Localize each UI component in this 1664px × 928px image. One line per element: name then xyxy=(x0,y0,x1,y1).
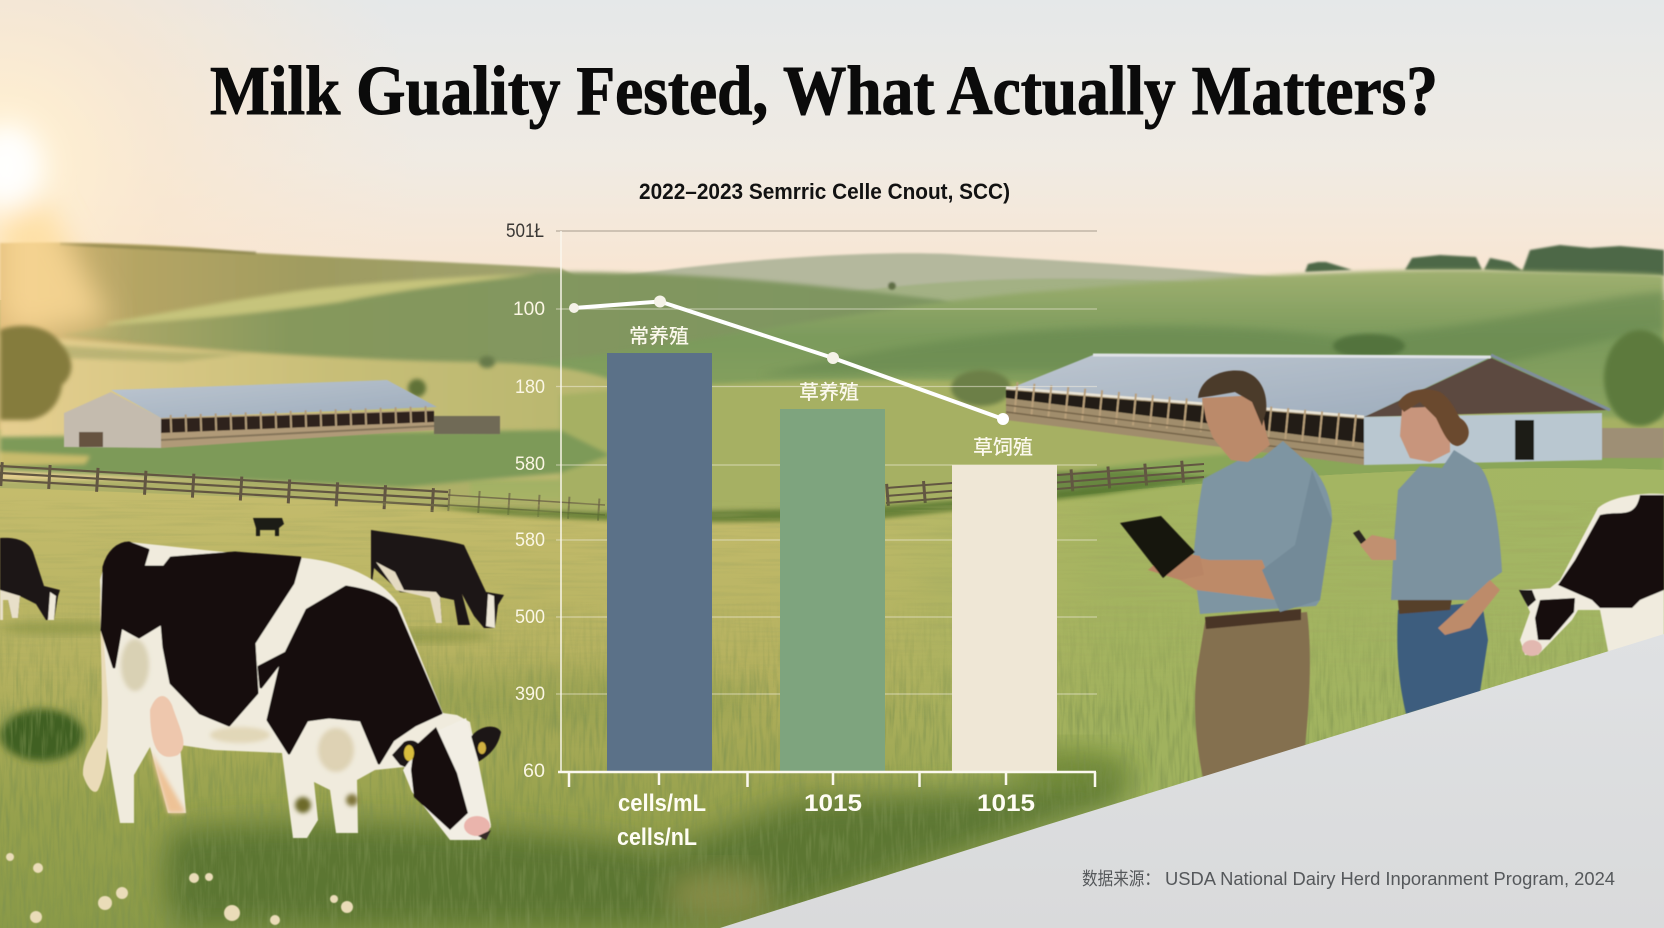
foreground pasture xyxy=(0,468,1664,928)
woman forearm and hand xyxy=(1353,530,1500,635)
barn left xyxy=(64,380,500,448)
cow: right xyxy=(1519,494,1664,680)
right cow muzzle xyxy=(1522,640,1542,656)
source note: 数据来源： xyxy=(1082,869,1160,889)
bar: 常养殖 xyxy=(607,353,712,771)
y axis labels: 500 xyxy=(515,607,545,628)
right cow body xyxy=(1520,494,1664,680)
bar labels: 草饲殖 xyxy=(973,436,1033,459)
woman hair xyxy=(1398,389,1469,446)
distant hills xyxy=(560,253,1320,340)
man neck and face xyxy=(1202,395,1270,462)
flowers xyxy=(6,853,353,925)
man belt xyxy=(1205,609,1301,629)
cow: left edge xyxy=(0,538,60,620)
cow: mid xyxy=(371,530,504,628)
treeline right xyxy=(1305,245,1664,276)
tablet xyxy=(1120,516,1195,578)
title: Milk Guality Fested, What Actually Matters? xyxy=(210,53,1438,130)
y axis labels xyxy=(506,221,545,782)
y axis labels: 60 xyxy=(523,761,545,782)
man hair xyxy=(1198,370,1266,426)
bar labels: 常养殖 xyxy=(629,325,689,348)
woman face xyxy=(1400,406,1450,462)
x axis labels xyxy=(617,790,1035,851)
right hill xyxy=(470,270,1664,500)
x axis labels: 1015 xyxy=(804,790,862,817)
cow head xyxy=(392,718,501,840)
cow: far xyxy=(253,518,284,536)
x axis labels: cells/nL xyxy=(617,824,697,851)
y axis labels: 501Ł xyxy=(506,221,544,242)
main cow xyxy=(83,542,501,840)
bar: 草养殖 xyxy=(780,409,885,771)
man trousers xyxy=(1195,612,1310,778)
cow body white xyxy=(100,542,491,840)
x axis and ticks xyxy=(558,772,1096,787)
sky xyxy=(0,0,1664,420)
source note: USDA National Dairy Herd Inporanment Program, 2024 xyxy=(1165,869,1615,889)
man sleeve and forearm xyxy=(1148,470,1332,612)
woman shirt xyxy=(1391,450,1502,600)
grass shadows xyxy=(0,621,1130,928)
barn right xyxy=(1006,355,1664,465)
cow shading xyxy=(121,639,358,813)
corner panel xyxy=(720,634,1664,928)
dark band behind fence xyxy=(430,478,1215,522)
x axis labels: 1015 xyxy=(977,790,1035,817)
man shirt xyxy=(1193,441,1332,614)
chart: somatic cell count bars and line xyxy=(506,179,1097,851)
man with tablet xyxy=(1120,370,1332,778)
sunlit field left xyxy=(0,335,640,480)
cow black patches xyxy=(102,543,441,763)
bar: 草饲殖 xyxy=(952,465,1057,771)
right cow black patch xyxy=(1558,495,1664,608)
y axis labels: 100 xyxy=(513,299,545,320)
y axis labels: 580 xyxy=(515,530,545,551)
bar labels: 草养殖 xyxy=(799,381,859,404)
y axis labels: 580 xyxy=(515,454,545,475)
chart title: 2022–2023 Semrric Celle Cnout, SCC) xyxy=(639,179,1010,204)
middle field xyxy=(0,380,1664,510)
trend line xyxy=(569,296,1009,425)
y axis labels: 180 xyxy=(515,377,545,398)
y axis xyxy=(560,231,562,771)
grass texture xyxy=(0,500,1664,928)
right cow ear xyxy=(1519,590,1536,607)
small background cows xyxy=(0,518,504,628)
cow udder xyxy=(150,696,184,757)
woman with phone xyxy=(1353,389,1502,714)
cow tail xyxy=(83,590,108,792)
woman jeans xyxy=(1397,602,1488,714)
left hill xyxy=(0,243,620,430)
fences xyxy=(0,464,1204,515)
x axis labels: cells/mL xyxy=(618,790,706,817)
trees xyxy=(0,326,1664,426)
base land xyxy=(0,300,1664,560)
right cow head patch xyxy=(1535,598,1575,640)
y axis labels: 390 xyxy=(515,684,545,705)
woman belt xyxy=(1398,598,1452,614)
middle hill xyxy=(60,272,981,385)
grid lines xyxy=(556,231,1097,694)
bar labels xyxy=(629,325,1033,459)
hill shadow xyxy=(760,292,1664,385)
sun rays xyxy=(0,124,110,335)
